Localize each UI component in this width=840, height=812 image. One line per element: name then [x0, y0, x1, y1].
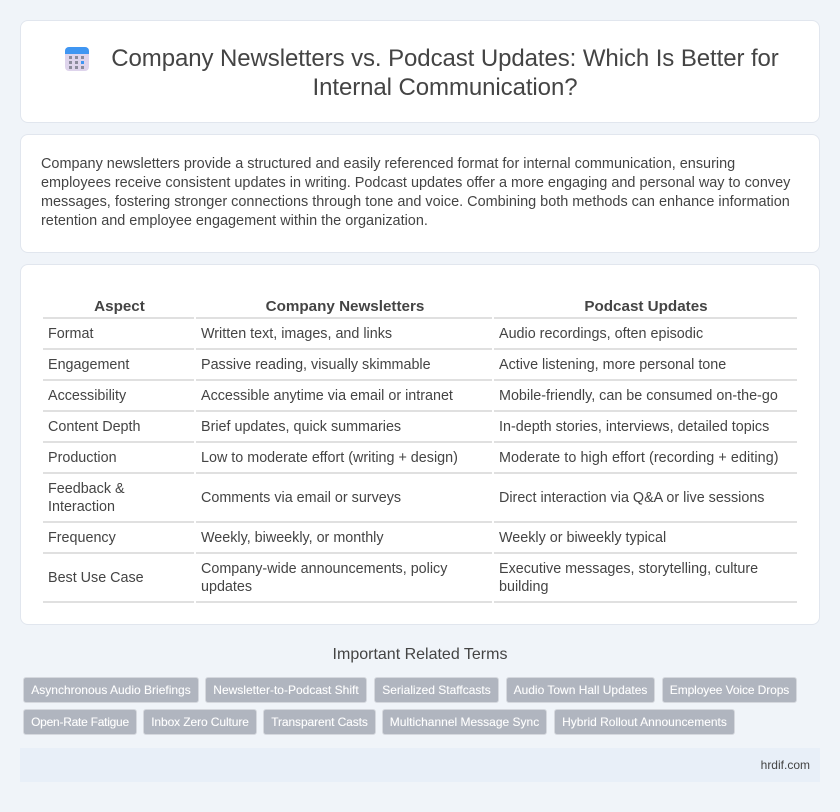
comparison table panel: Moderate to high effort (recording + editing): [499, 450, 779, 466]
intro text: [41, 156, 790, 229]
tag: Hybrid Rollout Announcements: [562, 715, 727, 729]
tag: Audio Town Hall Updates: [514, 683, 647, 697]
tag: [143, 709, 257, 735]
comparison table panel: Company-wide announcements, policy: [201, 561, 447, 577]
header panel: [20, 20, 820, 123]
row: Content Depth: Content Depth: [48, 419, 140, 435]
tag: Newsletter-to-Podcast Shift: [213, 683, 359, 697]
title: [111, 45, 779, 101]
table header: Company Newsletters: Company Newsletters: [266, 298, 424, 315]
comparison table panel: Mobile-friendly, can be consumed on-the-go: [499, 388, 778, 404]
comparison table panel: Weekly or biweekly typical: [499, 530, 666, 546]
row: Best Use Case: Best Use Case: [48, 570, 144, 586]
tag: [263, 709, 376, 735]
title: Internal Communication?: [313, 74, 577, 101]
comparison table panel: Active listening, more personal tone: [499, 357, 726, 373]
tag: [382, 709, 547, 735]
tag: Multichannel Message Sync: [390, 715, 539, 729]
intro panel: [20, 134, 820, 253]
comparison table panel: Low to moderate effort (writing + design): [201, 450, 458, 466]
intro text: messages, fostering stronger connections through tone and voice. Combining both methods can enhance information: [41, 194, 790, 210]
row: Accessibility: Accessibility: [48, 388, 126, 404]
comparison table panel: Brief updates, quick summaries: [201, 419, 401, 435]
tag: [205, 677, 367, 703]
tag: Inbox Zero Culture: [151, 715, 249, 729]
row: Format: Format: [48, 326, 93, 342]
row: Production: Production: [48, 450, 117, 466]
intro text: Company newsletters provide a structured and easily referenced format for internal communication, ensuring: [41, 156, 735, 172]
comparison table panel: [20, 264, 820, 625]
table header: Podcast Updates: Podcast Updates: [584, 298, 708, 315]
tag: [374, 677, 499, 703]
tag: [23, 709, 137, 735]
row: Feedback & Interaction: Feedback &: [48, 481, 125, 497]
intro text: retention and employee engagement within the organization.: [41, 213, 428, 229]
comparison table panel: Executive messages, storytelling, culture: [499, 561, 758, 577]
tag: Serialized Staffcasts: [382, 683, 491, 697]
comparison table panel: Weekly, biweekly, or monthly: [201, 530, 384, 546]
comparison table panel: Written text, images, and links: [201, 326, 392, 342]
row: Frequency: Frequency: [48, 530, 116, 546]
tag: [506, 677, 655, 703]
related terms tags: [23, 677, 797, 735]
tag: [662, 677, 797, 703]
tag: [23, 677, 199, 703]
comparison table panel: Passive reading, visually skimmable: [201, 357, 431, 373]
row: Feedback & Interaction: [48, 481, 125, 515]
intro text: employees receive consistent updates in writing. Podcast updates offer a more engaging and personal way to convey: [41, 175, 790, 191]
tag: Employee Voice Drops: [670, 683, 789, 697]
comparison table panel: updates: [201, 579, 252, 595]
tag: Open-Rate Fatigue: [31, 715, 129, 729]
title: Company Newsletters vs. Podcast Updates: Which Is Better for: [111, 45, 779, 72]
footer bar: [20, 748, 820, 782]
related terms heading: Important Related Terms: [333, 646, 507, 663]
comparison table panel: Accessible anytime via email or intranet: [201, 388, 453, 404]
comparison table panel: Direct interaction via Q&A or live sessions: [499, 490, 764, 506]
row: Feedback & Interaction: Interaction: [48, 499, 115, 515]
comparison table panel: Audio recordings, often episodic: [499, 326, 703, 342]
tag: [554, 709, 735, 735]
footer credit: hrdif.com: [761, 758, 810, 772]
tag: Asynchronous Audio Briefings: [31, 683, 191, 697]
row: Engagement: Engagement: [48, 357, 129, 373]
comparison table panel: Comments via email or surveys: [201, 490, 401, 506]
comparison table panel: In-depth stories, interviews, detailed topics: [499, 419, 769, 435]
tag: Transparent Casts: [271, 715, 368, 729]
comparison table panel: building: [499, 579, 548, 595]
icon: calendar: [65, 47, 89, 71]
table header: Aspect: Aspect: [94, 298, 145, 315]
